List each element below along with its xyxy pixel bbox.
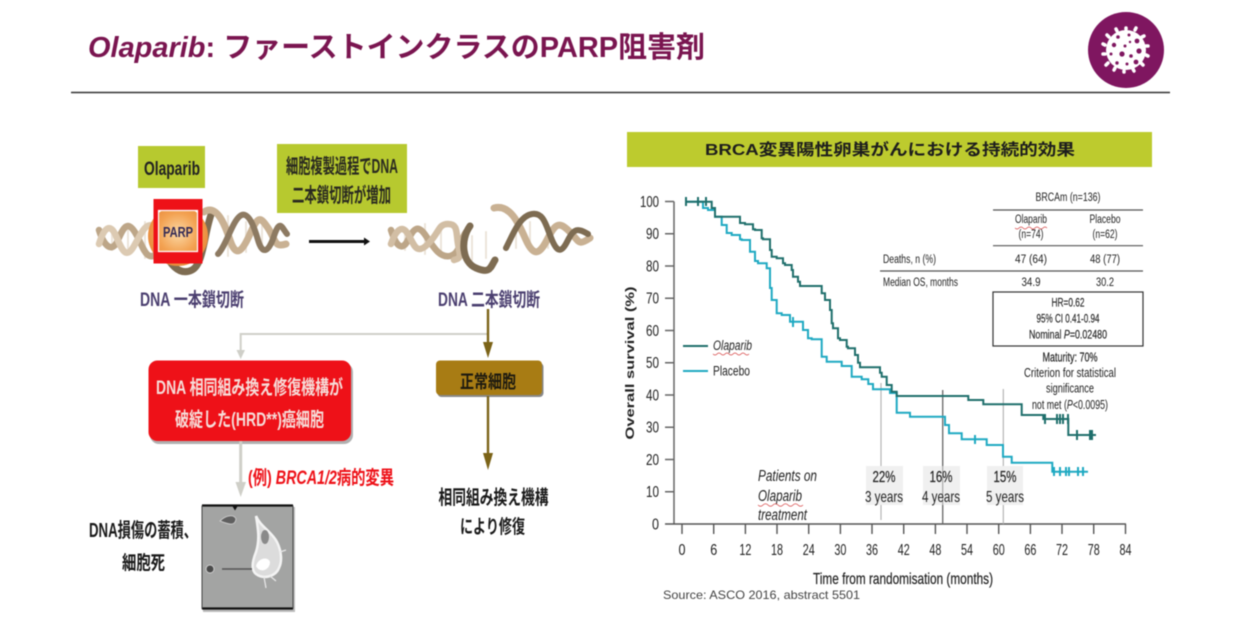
icon: virus badge <box>1088 12 1164 88</box>
text: repair by homologous recombination: により修復 <box>460 516 525 538</box>
image: dying cell micrograph <box>202 506 295 612</box>
x axis: 6 <box>710 542 717 559</box>
PARP marker: PARP <box>163 224 193 241</box>
x axis: 30 <box>834 542 846 559</box>
note: patients on Olaparib treatment: Patients on <box>758 468 817 485</box>
statistics table <box>880 192 1143 289</box>
y axis: 100 <box>640 194 659 211</box>
maturity note: Maturity: 70% <box>1042 350 1098 364</box>
x axis label: Time from randomisation (months) <box>813 571 993 588</box>
x axis: 0 <box>678 542 686 559</box>
maturity note: Criterion for statistical <box>1024 366 1116 380</box>
annotation: 4 years 16%: 16% <box>930 469 952 486</box>
statistics table: Deaths, n (%) <box>883 254 936 266</box>
y axis: 80 <box>646 258 659 276</box>
title: Olaparib: ファーストインクラスのPARP阻害剤 <box>88 31 705 64</box>
arrow: normal cell to repair <box>483 396 493 470</box>
hazard ratio box <box>993 292 1143 346</box>
text: DNA damage and cell death: DNA損傷の蓄積、 <box>89 519 197 542</box>
PARP marker <box>148 199 208 266</box>
box: normal cell: 正常細胞 <box>460 372 516 392</box>
legend: Olaparib <box>713 338 752 353</box>
hazard ratio box: 95% CI 0.41-0.94 <box>1036 314 1100 326</box>
box: HRD tumour cell: DNA 相同組み換え修復機構が <box>156 376 343 399</box>
x axis: 48 <box>929 542 941 559</box>
reference lines at 3, 4 and 5 years <box>881 383 1003 524</box>
annotation: 4 years 16% <box>922 466 960 506</box>
x axis: 12 <box>739 542 751 559</box>
x axis: 42 <box>898 542 910 559</box>
y axis: 90 <box>646 226 659 243</box>
box: normal cell <box>436 360 544 397</box>
annotation: 5 years 15% <box>986 466 1024 506</box>
text: DNA damage and cell death <box>89 519 197 574</box>
panel: survival chart heading <box>627 132 1152 167</box>
x axis: 36 <box>866 542 878 559</box>
x axis: 54 <box>961 542 973 559</box>
box: HRD tumour cell: 破綻した(HRD**)癌細胞 <box>175 409 324 431</box>
x axis: 78 <box>1088 542 1100 559</box>
annotation: 3 years 22%: 22% <box>872 469 896 486</box>
hazard ratio box: HR=0.62 <box>1052 298 1084 310</box>
x axis: 60 <box>993 542 1005 559</box>
statistics table: 34.9 <box>1022 277 1040 289</box>
statistics table: (n=74) <box>1018 229 1044 241</box>
statistics table: BRCAm (n=136) <box>1036 192 1101 204</box>
icon: DNA helix with single-strand break <box>99 210 287 272</box>
statistics table: (n=62) <box>1092 229 1118 241</box>
y axis label: Overall survival (%) <box>625 286 637 440</box>
chart: overall survival Kaplan-Meier <box>625 192 1143 588</box>
arrow: progression <box>309 238 370 246</box>
icon: DNA helix with double-strand break <box>391 207 590 270</box>
source note: Source: ASCO 2016, abstract 5501 <box>663 588 860 602</box>
legend: Placebo <box>713 364 750 378</box>
box: HRD tumour cell <box>148 360 353 444</box>
note: patients on Olaparib treatment <box>758 468 817 524</box>
y axis: 10 <box>646 484 659 501</box>
x axis: 18 <box>771 542 783 559</box>
callout: replication double-strand breaks: 二本鎖切断が増加 <box>292 183 391 207</box>
y axis: 70 <box>646 291 659 308</box>
Olaparib label box: Olaparib <box>144 159 200 180</box>
y axis: 40 <box>646 388 659 404</box>
label: BRCA example: (例) BRCA1/2病的変異 <box>248 467 394 489</box>
y axis: 50 <box>646 355 659 372</box>
maturity note: significance <box>1046 382 1094 396</box>
panel: survival chart heading: BRCA変異陽性卵巣がんにおける持続的効果 <box>705 140 1075 159</box>
y axis: 0 <box>652 516 659 534</box>
callout: replication double-strand breaks <box>277 144 407 213</box>
maturity note <box>1024 350 1116 412</box>
curve: placebo <box>685 202 1088 476</box>
panel: PARP mechanism diagram <box>89 144 590 612</box>
arrow: to tumour cell pathway <box>236 334 488 359</box>
annotation: 4 years 16%: 4 years <box>922 489 960 506</box>
arrow: tumour cell to cell death <box>236 441 246 497</box>
arrow: to normal cell <box>483 309 493 358</box>
annotation: 5 years 15%: 5 years <box>986 489 1024 506</box>
statistics table: 48 (77) <box>1090 254 1120 266</box>
y axis <box>640 194 674 534</box>
y axis: 30 <box>646 420 659 437</box>
callout: replication double-strand breaks: 細胞複製過程でDNA <box>286 155 398 178</box>
x axis <box>665 524 1132 559</box>
text: repair by homologous recombination <box>438 486 549 538</box>
statistics table: 47 (64) <box>1015 254 1047 266</box>
note: patients on Olaparib treatment: Olaparib <box>758 488 802 505</box>
maturity note: not met (P<0.0095) <box>1032 398 1108 412</box>
x axis: 24 <box>803 542 815 559</box>
statistics table: Median OS, months <box>883 277 958 289</box>
hazard ratio box: Nominal P=0.02480 <box>1029 330 1107 342</box>
legend <box>683 338 752 378</box>
x axis: 72 <box>1056 542 1068 559</box>
statistics table: Placebo <box>1090 214 1120 226</box>
label: DNA single-strand break: DNA 一本鎖切断 <box>140 289 244 311</box>
label: DNA double-strand break: DNA 二本鎖切断 <box>438 289 540 311</box>
x axis: 84 <box>1120 542 1132 559</box>
annotation: 3 years 22% <box>865 466 903 506</box>
annotation: 3 years 22%: 3 years <box>865 489 903 506</box>
Olaparib label box <box>138 146 205 188</box>
curve: olaparib <box>685 197 1096 440</box>
annotation: 5 years 15%: 15% <box>994 469 1016 486</box>
statistics table: 30.2 <box>1096 277 1114 289</box>
text: DNA damage and cell death: 細胞死 <box>122 552 165 574</box>
x axis: 66 <box>1024 542 1036 559</box>
note: patients on Olaparib treatment: treatment <box>758 507 808 524</box>
y axis: 20 <box>646 452 659 469</box>
statistics table: Olaparib <box>1015 214 1047 226</box>
text: repair by homologous recombination: 相同組み換え機構 <box>438 486 549 509</box>
y axis: 60 <box>646 323 659 340</box>
